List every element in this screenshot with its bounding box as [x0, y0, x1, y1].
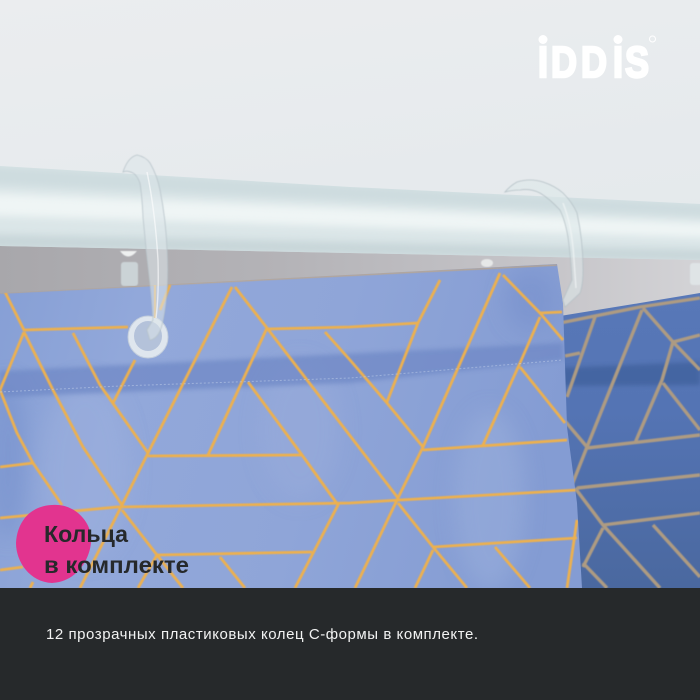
- IDDIS logo: IDDIS: [538, 38, 649, 87]
- hem stitching: [0, 360, 563, 392]
- ring body: [123, 155, 168, 340]
- badge heading: Кольца: [44, 521, 128, 547]
- fabric folds and sheen: [0, 270, 555, 590]
- small hook behind the rod, right edge: [690, 263, 700, 285]
- orange line seen through ring: [154, 285, 156, 318]
- transparent C-ring, right: [505, 180, 583, 307]
- small hook behind the rod, centre: [481, 259, 493, 267]
- rear curtain pattern: [560, 298, 700, 588]
- ring highlight: [147, 172, 158, 318]
- shadow area under the rod: [0, 240, 700, 320]
- badge: kit label: [16, 505, 189, 583]
- small ring behind the rod, left: [120, 251, 138, 286]
- hem shadow band: [0, 343, 563, 397]
- geometric orange pattern: [0, 265, 577, 588]
- badge heading: в комплекте: [44, 552, 189, 578]
- rear curtain: [555, 290, 700, 590]
- rear curtain hem shadow: [560, 362, 700, 386]
- caption text: 12 прозрачных пластиковых колец С-формы в комплекте.: [46, 626, 478, 643]
- main curtain: [0, 260, 590, 590]
- transparent C-ring, left: [123, 155, 168, 358]
- metal eyelet: [128, 316, 168, 358]
- bottom caption bar: [0, 588, 700, 700]
- fabric base: [0, 260, 590, 590]
- wall background: [0, 0, 700, 300]
- shower curtain rod: [0, 166, 700, 260]
- pink blob: [16, 505, 91, 583]
